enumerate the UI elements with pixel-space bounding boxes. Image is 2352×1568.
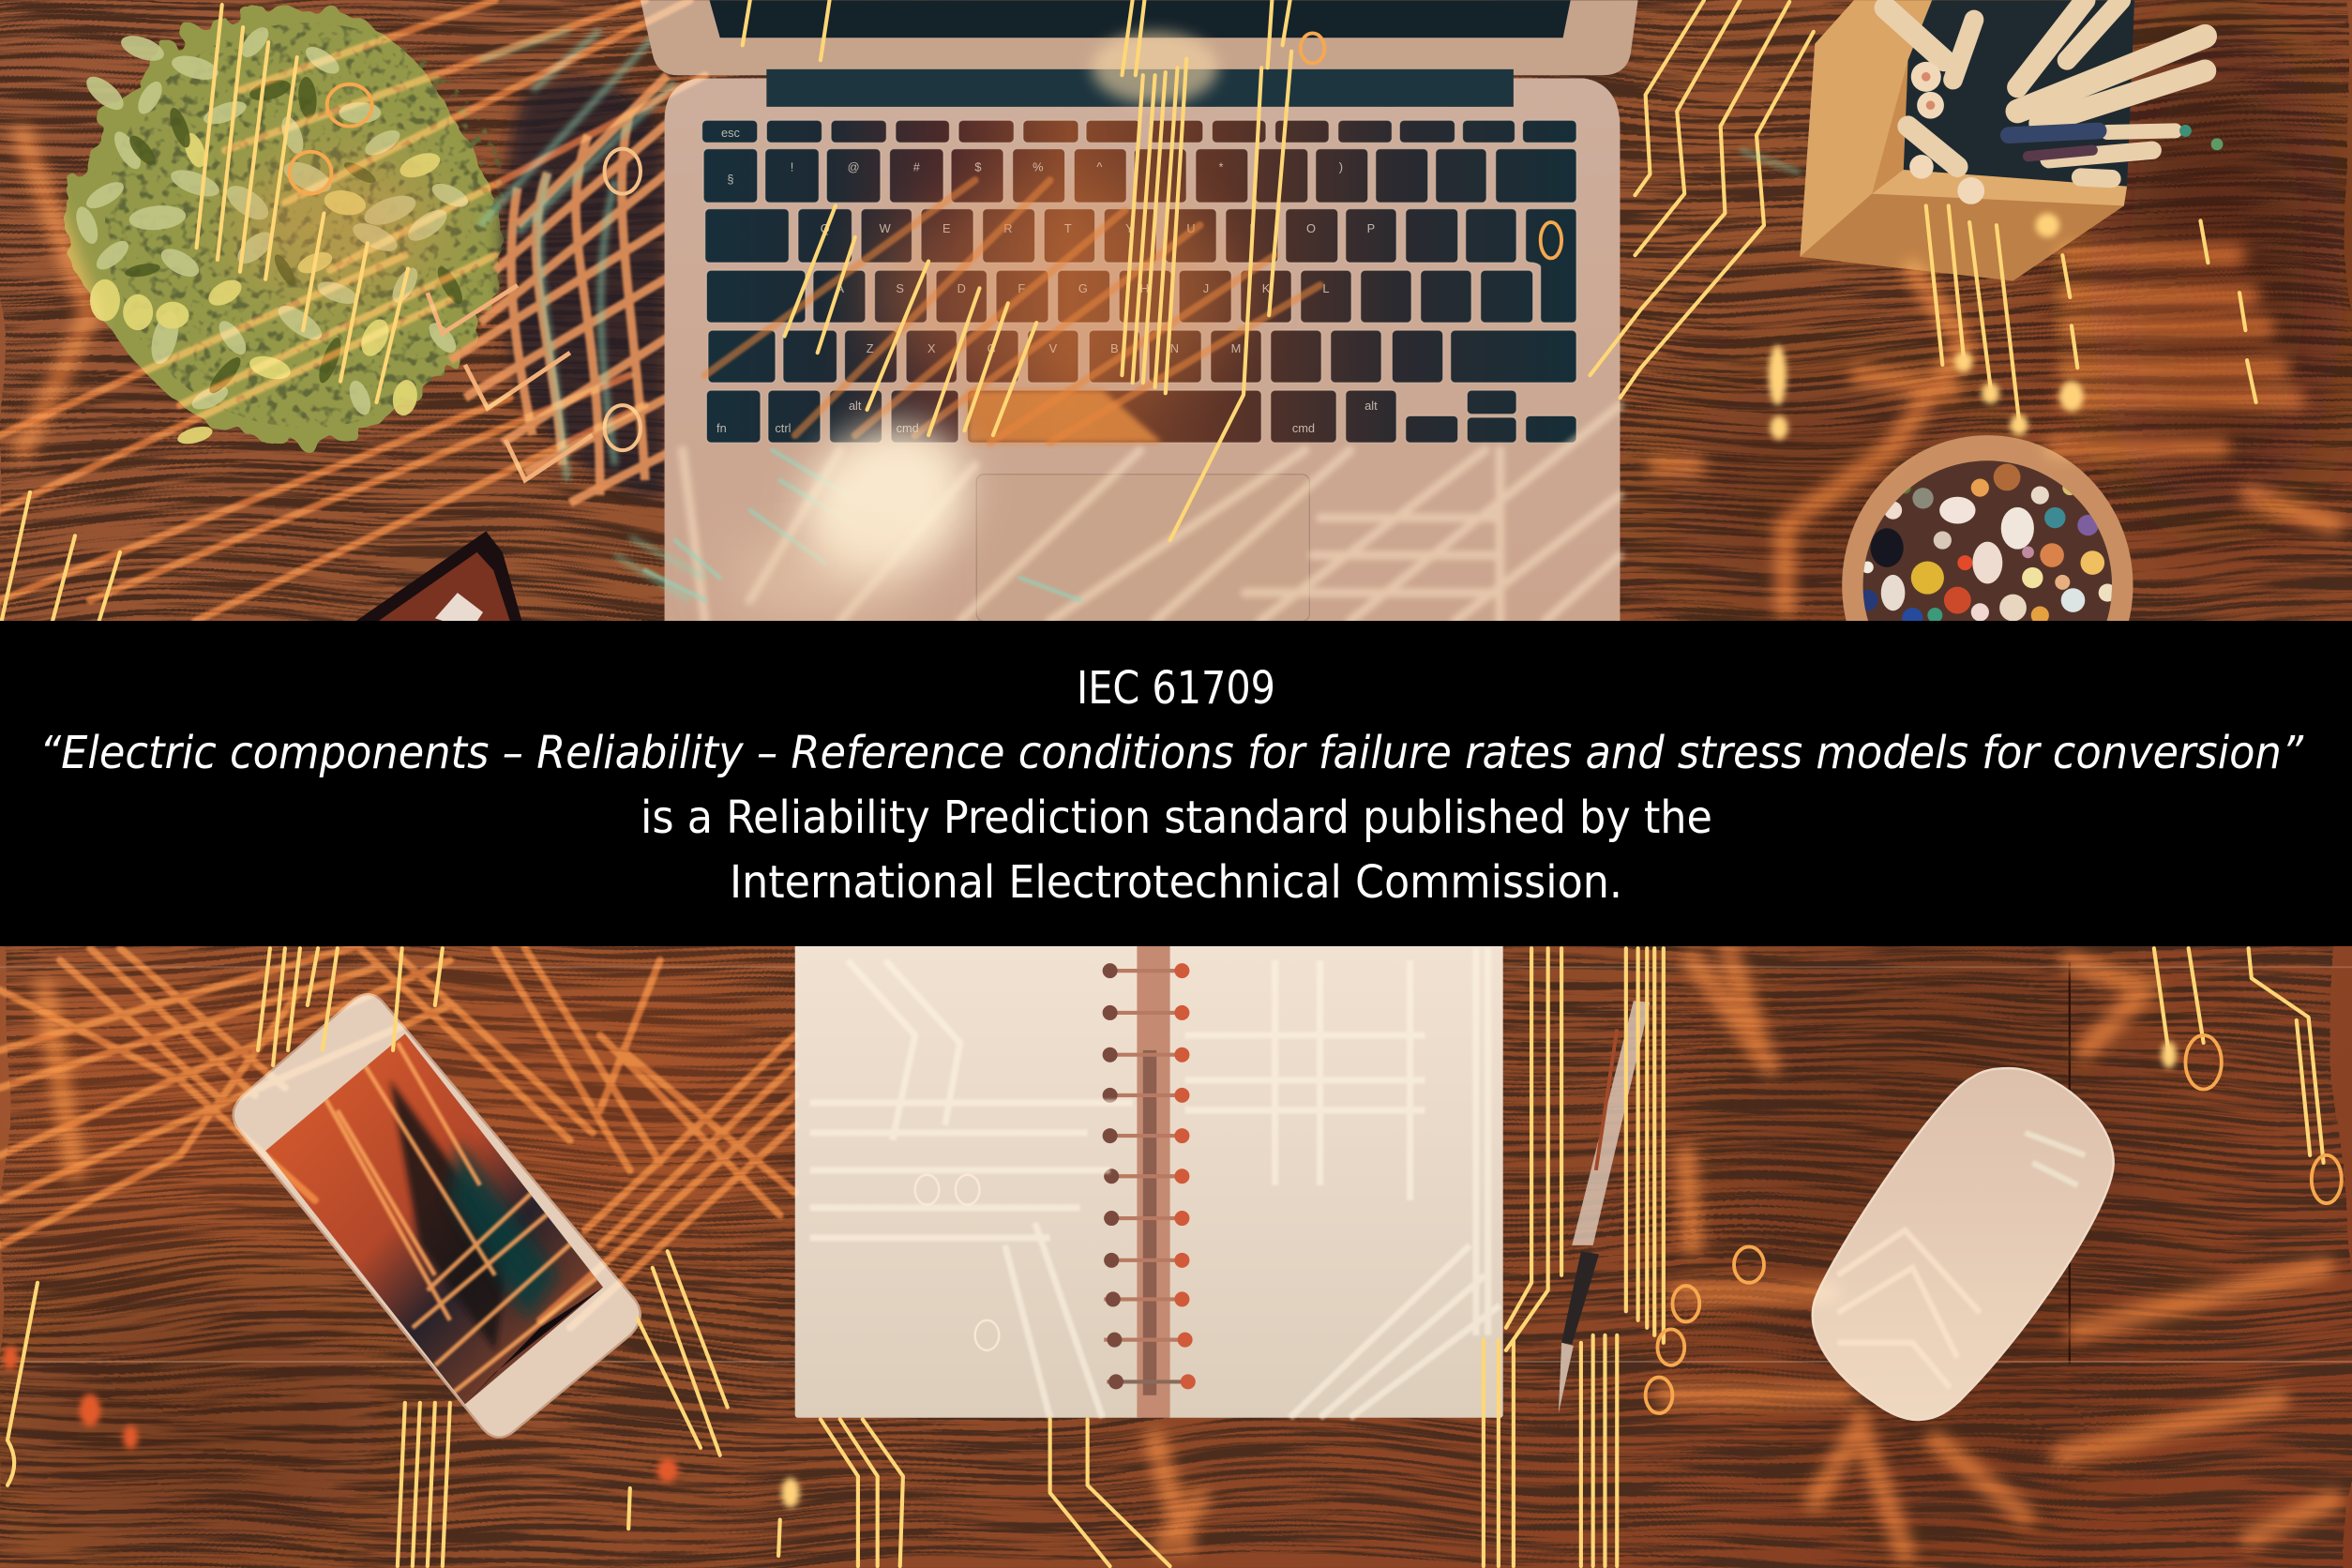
keyboard: * <box>1218 160 1223 174</box>
phone screen <box>255 1028 615 1410</box>
standard title: “Electric components – Reliability – Reference conditions for failure rates and stress models for conversion” <box>39 727 2304 779</box>
keyboard: ctrl <box>775 421 791 435</box>
laptop lid <box>641 0 1638 75</box>
keyboard: J <box>1203 281 1209 295</box>
keyboard: esc <box>721 126 741 140</box>
keyboard: I <box>1249 221 1253 235</box>
keyboard: Y <box>1125 221 1134 235</box>
pen <box>1559 1001 1650 1413</box>
keyboard: § <box>727 172 734 186</box>
spiral rings <box>1104 971 1194 1381</box>
pin bowl <box>1842 435 2133 621</box>
black text band <box>0 621 2352 946</box>
keyboard <box>702 120 1576 443</box>
right page <box>1167 930 1503 1418</box>
laptop screen <box>710 0 1571 38</box>
keyboard: cmd <box>1292 421 1315 435</box>
mouse <box>1813 1068 2114 1420</box>
description line 2: International Electrotechnical Commission. <box>730 856 1622 909</box>
keyboard: cmd <box>897 421 919 435</box>
keyboard: T <box>1064 221 1072 235</box>
keyboard: W <box>880 221 892 235</box>
lattice of reflected keys beside the plant <box>428 30 675 503</box>
keyboard: K <box>1262 281 1271 295</box>
keyboard: ^ <box>1096 160 1102 174</box>
keyboard: C <box>988 341 996 355</box>
keyboard: fn <box>716 421 727 435</box>
keyboard: N <box>1170 341 1179 355</box>
keyboard: Z <box>867 341 874 355</box>
laptop <box>641 0 1638 621</box>
laptop deck <box>665 78 1620 621</box>
keyboard: H <box>1140 281 1149 295</box>
keyboard: ( <box>1279 160 1284 174</box>
spacebar reflection <box>968 390 1163 443</box>
smartphone <box>234 994 641 1438</box>
keyboard: P <box>1367 221 1375 235</box>
keyboard: A <box>836 281 844 295</box>
standard name: IEC 61709 <box>1077 662 1275 715</box>
keyboard: M <box>1231 341 1241 355</box>
keyboard: $ <box>974 160 981 174</box>
keyboard: alt <box>849 399 862 413</box>
left page <box>795 930 1143 1418</box>
pale palm-rest glow <box>773 394 998 611</box>
streaks across keyboard and deck <box>645 180 1620 621</box>
keyboard: D <box>957 281 966 295</box>
trackpad <box>976 475 1309 621</box>
plant <box>45 0 525 450</box>
keyboard: R <box>1003 221 1012 235</box>
keyboard: B <box>1110 341 1119 355</box>
keyboard: % <box>1033 160 1044 174</box>
laptop hinge <box>766 69 1514 107</box>
keyboard: # <box>913 160 921 174</box>
keyboard: O <box>1306 221 1316 235</box>
keyboard: Q <box>821 221 830 235</box>
keyboard: S <box>896 281 904 295</box>
keyboard: X <box>927 341 936 355</box>
eyeglasses <box>355 531 522 621</box>
keyboard: F <box>1018 281 1025 295</box>
keyboard: alt <box>1364 399 1378 413</box>
keyboard: L <box>1322 281 1330 295</box>
keyboard: ! <box>791 160 793 174</box>
keyboard: E <box>942 221 951 235</box>
spine <box>1137 930 1170 1418</box>
keyboard: G <box>1078 281 1088 295</box>
keyboard: ) <box>1339 160 1343 174</box>
keyboard: V <box>1049 341 1058 355</box>
description line 1: is a Reliability Prediction standard published by the <box>641 792 1712 844</box>
keyboard: @ <box>848 160 860 174</box>
keyboard: U <box>1186 221 1196 235</box>
faint circuit reflection on pages <box>810 948 1500 1418</box>
notebook <box>795 930 1503 1418</box>
pencil holder <box>1800 0 2223 280</box>
